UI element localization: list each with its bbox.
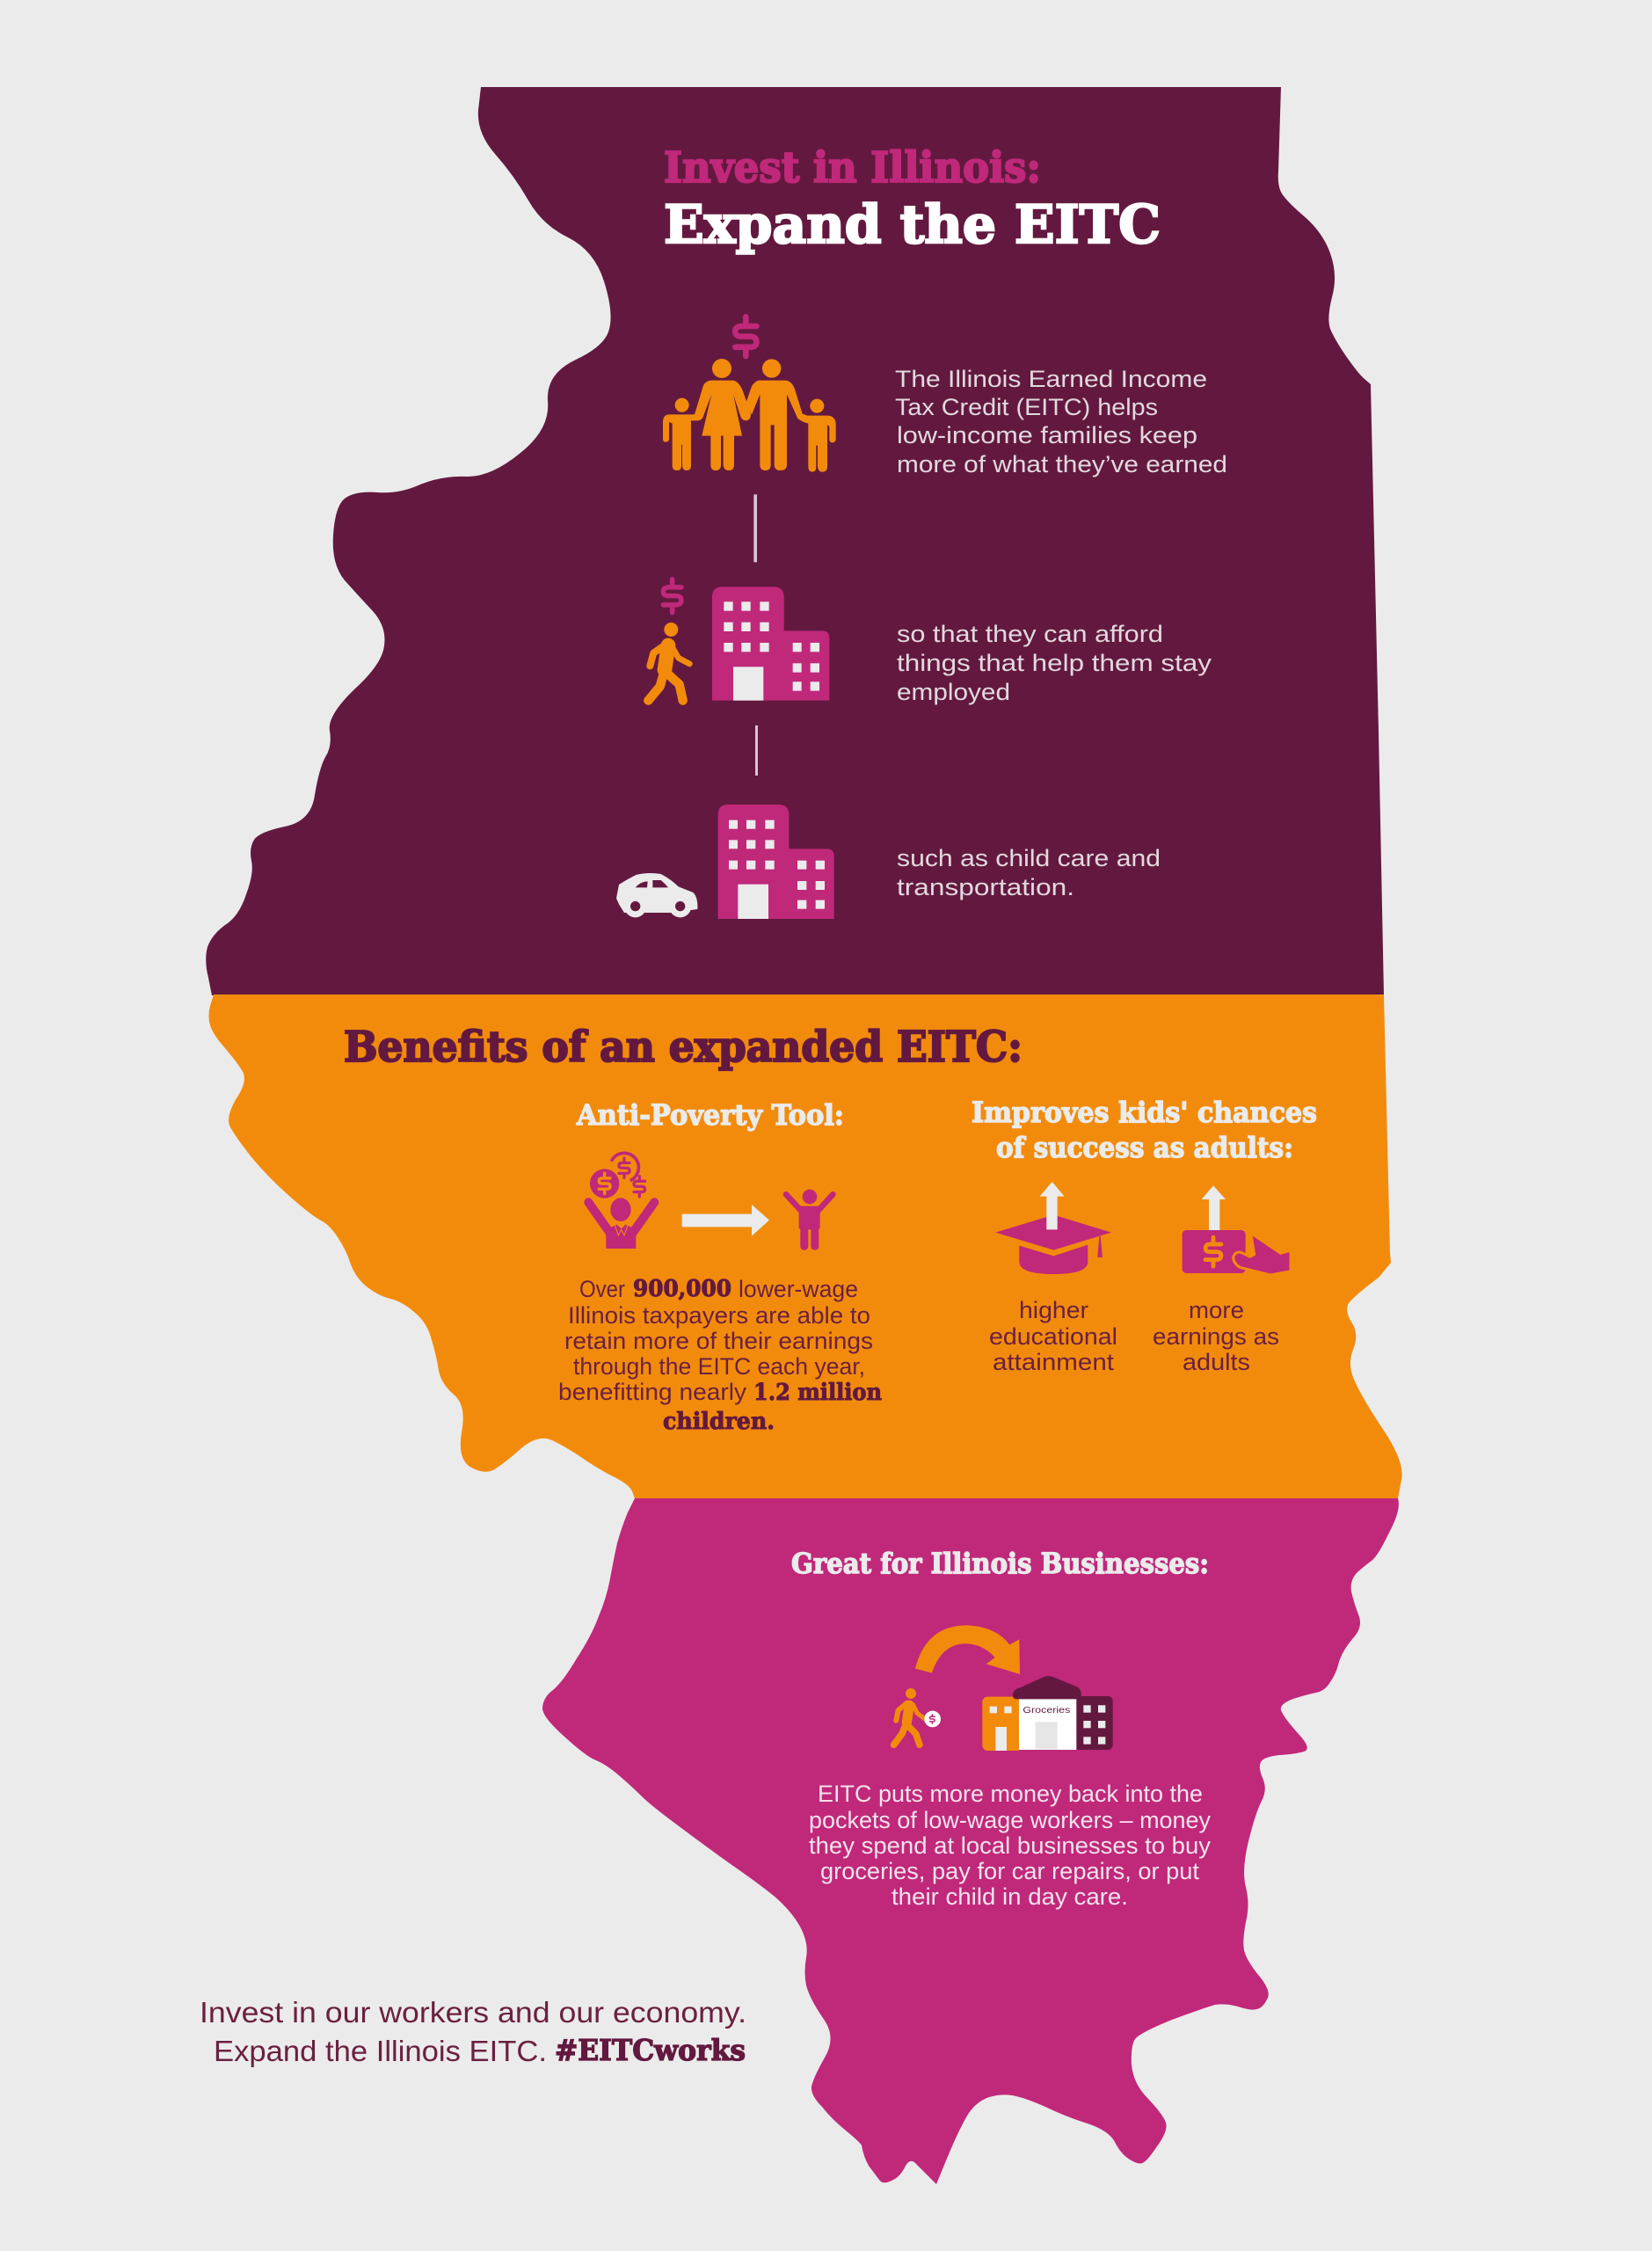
text: anti-poverty description: children. [663, 1409, 775, 1435]
text: business description [809, 1781, 1211, 1910]
text: EITC explanation: The Illinois Earned Income [895, 366, 1207, 392]
icon: family with dollar sign [663, 317, 836, 562]
text: business description: their child in day care. [891, 1883, 1128, 1910]
heading: improves kids' chances [972, 1096, 1317, 1164]
state outline: north [206, 87, 1384, 995]
icon: adult with coins, arrow, child [588, 1153, 833, 1250]
footer call to action: Expand the Illinois EITC. [214, 2035, 547, 2067]
text: business description: EITC puts more money back into the [818, 1781, 1203, 1807]
text: EITC explanation: more of what they’ve earned [897, 451, 1227, 477]
text: anti-poverty description: Over [579, 1276, 625, 1302]
heading: anti-poverty tool: Anti-Poverty Tool: [576, 1098, 844, 1132]
state outline: central [209, 994, 1402, 1498]
text: higher educational attainment: attainment [993, 1349, 1115, 1375]
text: stay employed: so that they can afford [897, 621, 1163, 647]
text: stay employed: employed [897, 679, 1010, 705]
icon: walking worker with coin [894, 1688, 941, 1745]
title: Invest in Illinois: [664, 143, 1041, 193]
panel: magenta southern Illinois section [542, 1498, 1399, 2184]
text: stay employed: things that help them stay [897, 650, 1212, 676]
text: EITC explanation: low-income families keep [897, 422, 1197, 448]
footer call to action: Invest in our workers and our economy. [200, 1996, 746, 2029]
text: child care and transportation: transportation. [897, 874, 1074, 900]
text: higher educational attainment: higher [1019, 1297, 1088, 1323]
text: anti-poverty description: retain more of their earnings [564, 1328, 873, 1354]
text: anti-poverty description: through the EITC each year, [573, 1353, 865, 1380]
text: business description: pockets of low-wage workers – money [809, 1807, 1211, 1833]
icon: worker spending at grocery store [894, 1625, 1113, 1751]
heading: great for businesses: Great for Illinois Businesses: [791, 1547, 1209, 1580]
text: more earnings as adults: more [1189, 1297, 1244, 1323]
footer call to action [200, 1996, 746, 2067]
text: anti-poverty description: lower-wage [739, 1276, 858, 1302]
text: stay employed [897, 621, 1212, 705]
text: anti-poverty description: Illinois taxpayers are able to [568, 1302, 870, 1329]
icon: hand with money and up arrow [1183, 1185, 1291, 1275]
icon: grocery store buildings: Groceries [1022, 1706, 1070, 1716]
icon: walking person with dollar and building [648, 579, 829, 701]
icon: car and building [616, 805, 834, 919]
text: EITC explanation: Tax Credit (EITC) helps [895, 394, 1158, 420]
text: business description: they spend at local businesses to buy [809, 1832, 1211, 1859]
heading: improves kids' chances: of success as adults: [996, 1131, 1293, 1164]
heading: improves kids' chances: Improves kids' chances [972, 1096, 1317, 1129]
title: Expand the EITC [664, 194, 1161, 256]
text: more earnings as adults: earnings as [1153, 1323, 1279, 1350]
text: anti-poverty description: benefitting nearly [558, 1379, 747, 1405]
heading: benefits: Benefits of an expanded EITC: [344, 1023, 1022, 1072]
text: more earnings as adults [1153, 1297, 1279, 1375]
text: child care and transportation: such as child care and [897, 845, 1161, 871]
icon: grocery store buildings [982, 1676, 1113, 1751]
text: anti-poverty description: 900,000 [633, 1276, 731, 1302]
text: higher educational attainment: educational [989, 1323, 1117, 1350]
text: higher educational attainment [989, 1297, 1117, 1375]
panel: orange central Illinois section [209, 994, 1402, 1498]
title [664, 143, 1161, 256]
text: business description: groceries, pay for car repairs, or put [820, 1858, 1199, 1884]
panel: purple northern Illinois section [206, 87, 1384, 995]
text: child care and transportation [897, 845, 1161, 900]
text: anti-poverty description: 1.2 million [753, 1380, 882, 1406]
footer call to action: #EITCworks [555, 2033, 746, 2067]
state outline: south [542, 1498, 1399, 2184]
text: anti-poverty description [558, 1276, 882, 1435]
text: EITC explanation [895, 366, 1227, 477]
text: more earnings as adults: adults [1183, 1349, 1250, 1375]
icon: curved arrow [915, 1625, 1020, 1674]
icon: graduation cap with up arrow [995, 1182, 1111, 1274]
